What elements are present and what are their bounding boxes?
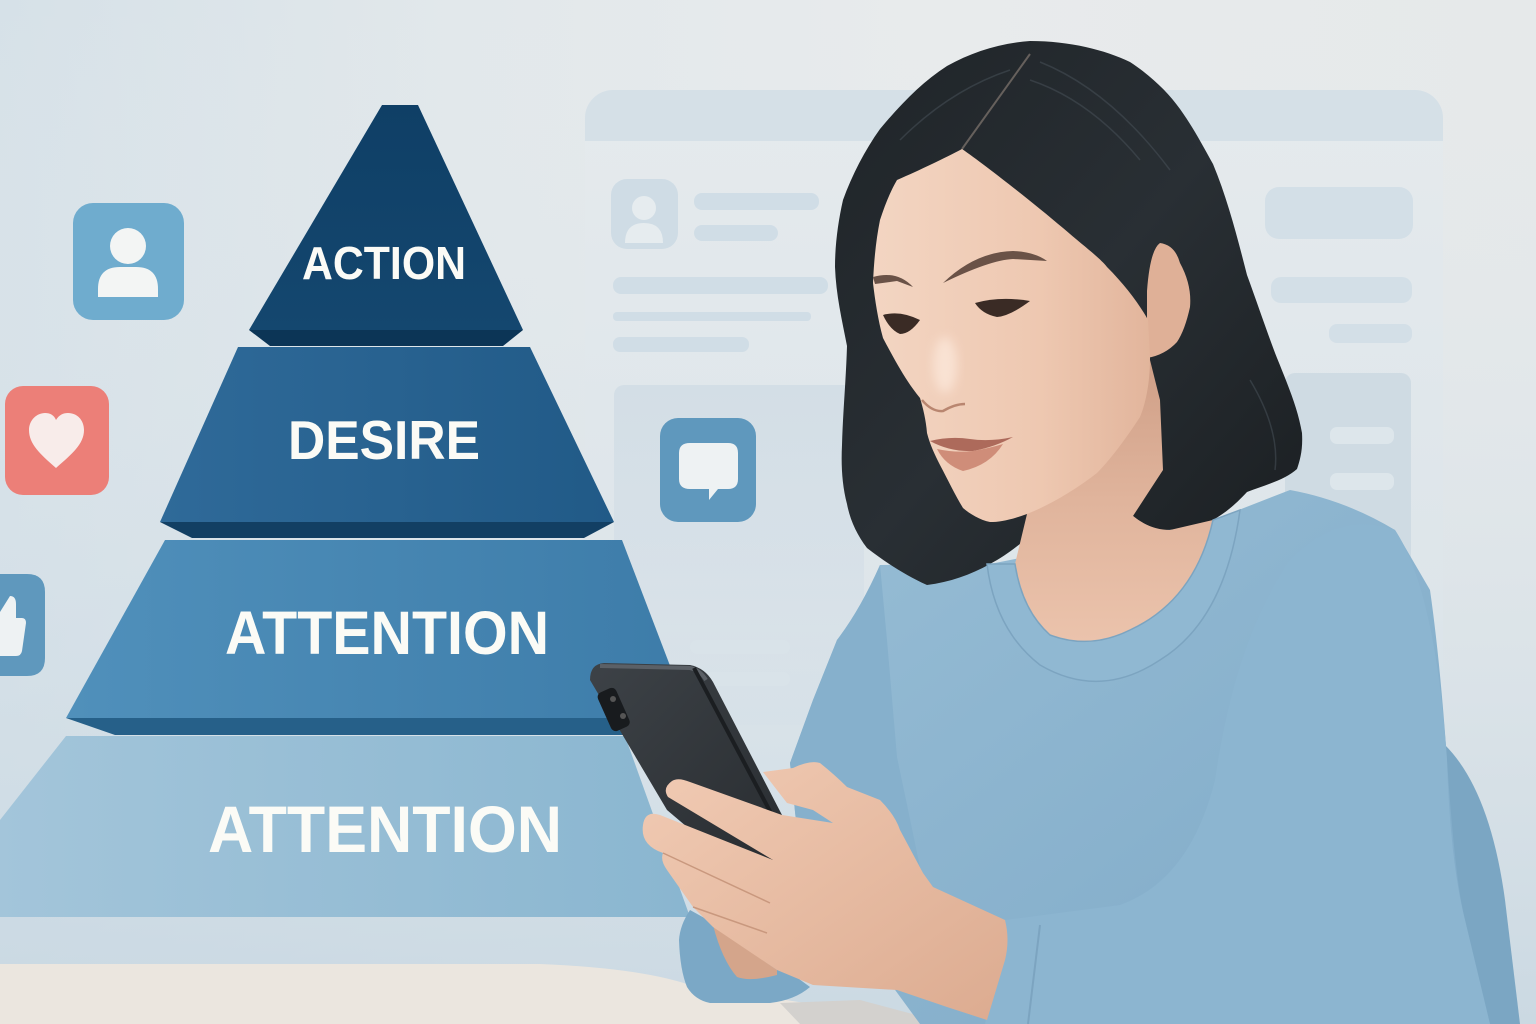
hair highlights <box>900 62 1276 470</box>
ear <box>1147 243 1190 358</box>
icon: user profile <box>73 203 184 320</box>
left arm shading <box>790 565 920 867</box>
icon: speech bubble <box>660 418 756 522</box>
tier: attention base <box>0 736 690 917</box>
woman <box>590 41 1520 1024</box>
background social feed panel <box>585 90 1443 960</box>
sweater body <box>790 490 1490 1024</box>
lips <box>930 437 1013 471</box>
table <box>0 964 950 1024</box>
hair silhouette <box>835 41 1302 585</box>
eyebrows <box>873 251 1047 287</box>
tier: desire <box>160 347 614 538</box>
right sleeve <box>985 524 1490 1024</box>
wrist <box>713 925 777 979</box>
pyramid <box>0 105 690 917</box>
nose <box>922 400 965 411</box>
collar <box>987 510 1240 681</box>
cuff <box>679 910 810 1003</box>
eyes <box>883 299 1030 334</box>
tier: attention: ATTENTION <box>225 599 549 667</box>
chair <box>1400 745 1520 1024</box>
tier: action <box>249 105 523 346</box>
tier: attention base: ATTENTION <box>208 792 562 866</box>
neck <box>1015 360 1213 641</box>
nose highlight <box>933 337 957 393</box>
face <box>873 149 1150 522</box>
tier: attention <box>66 540 690 735</box>
tier: desire: DESIRE <box>288 409 480 471</box>
hair part <box>962 54 1030 149</box>
phone <box>590 663 782 862</box>
icon: heart <box>5 386 109 495</box>
icon: thumbs up <box>0 574 45 676</box>
tier: action: ACTION <box>302 237 466 289</box>
hand <box>643 762 1008 1020</box>
sleeve cuff ribbing <box>1028 925 1040 1024</box>
